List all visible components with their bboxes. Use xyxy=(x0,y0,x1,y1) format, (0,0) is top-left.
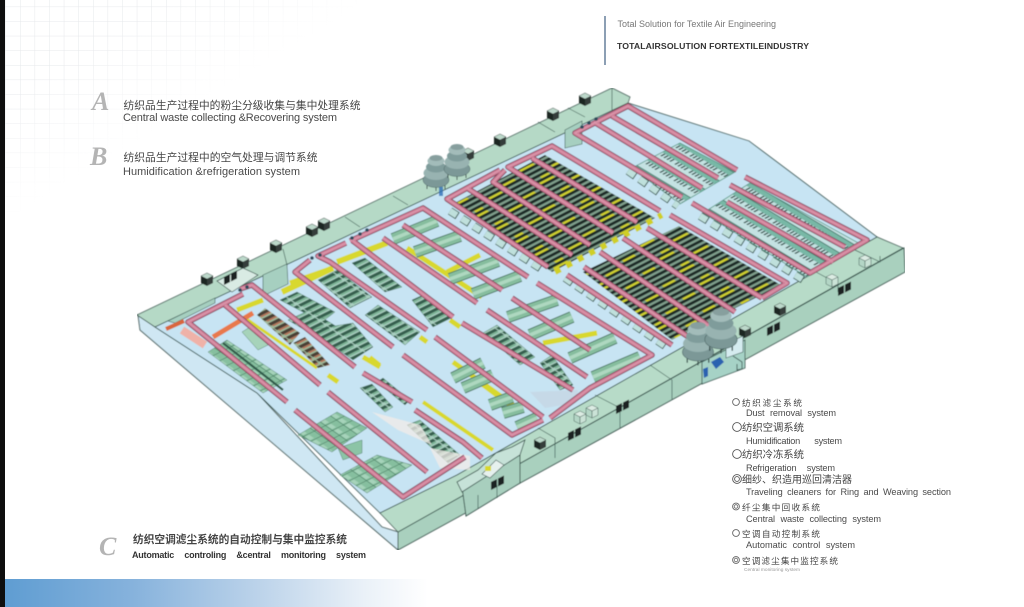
legend item: automatic control: Automatic control system xyxy=(746,540,855,550)
legend item: central waste: 纤尘集中回收系统 xyxy=(742,502,820,512)
legend xyxy=(733,397,951,573)
system A caption: Central waste collecting &Recovering system xyxy=(123,112,337,124)
back wall top xyxy=(137,88,630,327)
header block xyxy=(604,16,809,65)
entrance annex xyxy=(457,440,525,516)
legend item: humidification xyxy=(733,421,842,446)
long green machine blocks xyxy=(393,221,640,427)
header block: TOTALAIRSOLUTION FORTEXTILEINDUSTRY xyxy=(617,41,809,51)
legend item: refrigeration: Refrigeration system xyxy=(746,463,835,473)
legend item: refrigeration: 纺织冷冻系统 xyxy=(742,448,804,461)
pale haze patches xyxy=(372,390,578,470)
floor xyxy=(155,103,877,513)
legend item: traveling cleaners xyxy=(733,473,951,497)
legend item: central monitoring xyxy=(733,555,838,573)
system C caption: 纺织空调滤尘系统的自动控制与集中监控系统 xyxy=(133,533,347,546)
cooling towers upper xyxy=(423,144,470,196)
orange ducts xyxy=(166,313,253,345)
legend item: dust removal: 纺织滤尘系统 xyxy=(742,397,802,408)
front wall face xyxy=(398,248,905,550)
legend item: automatic control xyxy=(733,528,855,550)
yellow ducts xyxy=(237,243,597,450)
legend item: automatic control: 空调自动控制系统 xyxy=(742,528,820,539)
legend item: central monitoring: Central monitoring system xyxy=(744,567,800,573)
rooftop units front wall xyxy=(534,255,871,450)
legend item: traveling cleaners: 细纱、织造用巡回清洁器 xyxy=(742,473,852,486)
system B caption: 纺织品生产过程中的空气处理与调节系统 xyxy=(124,150,318,164)
dark machine spine xyxy=(223,343,283,390)
system C caption xyxy=(99,532,366,561)
reddish machine groups xyxy=(257,308,330,368)
legend item: central waste: Central waste collecting system xyxy=(746,514,881,524)
factory isometric drawing xyxy=(137,88,905,550)
pump room recess xyxy=(702,336,745,384)
header block: Total Solution for Textile Air Engineering xyxy=(618,19,776,29)
traveling cleaner frame zones xyxy=(632,143,862,277)
wall joints xyxy=(283,88,880,458)
air ducts xyxy=(188,106,867,497)
rooftop units back wall xyxy=(201,93,591,292)
system A caption: 纺织品生产过程中的粉尘分级收集与集中处理系统 xyxy=(124,98,361,112)
legend item: humidification: 纺织空调系统 xyxy=(742,421,804,434)
left black edge xyxy=(0,0,5,607)
dark green machine groups xyxy=(280,258,573,463)
legend item: central waste xyxy=(733,502,881,524)
duct wall connections xyxy=(238,117,598,292)
bottom gradient band xyxy=(5,579,428,607)
left side face xyxy=(138,315,398,550)
legend item: humidification: Humidification system xyxy=(746,436,842,446)
legend item: refrigeration xyxy=(733,448,835,473)
system A caption xyxy=(90,87,361,124)
system C caption: C xyxy=(99,532,117,561)
legend item: dust removal: Dust removal system xyxy=(746,408,836,418)
light green machine groups xyxy=(208,327,412,493)
legend item: traveling cleaners: Traveling cleaners for Ring and Weaving section xyxy=(746,487,951,497)
legend item: central monitoring: 空调滤尘集中监控系统 xyxy=(742,555,838,566)
front wall top xyxy=(380,237,903,532)
system C caption: Automatic controling &central monitoring system xyxy=(132,550,366,560)
dense ring frame zones xyxy=(453,155,781,340)
system B caption xyxy=(89,142,318,178)
background grid xyxy=(5,0,283,171)
inner wall panels xyxy=(168,121,582,323)
cooling towers lower xyxy=(682,308,737,365)
system B caption: Humidification &refrigeration system xyxy=(123,166,300,178)
system B caption: B xyxy=(89,142,107,171)
legend item: dust removal xyxy=(733,397,836,418)
small unit rows xyxy=(450,171,805,346)
system A caption: A xyxy=(90,87,109,116)
